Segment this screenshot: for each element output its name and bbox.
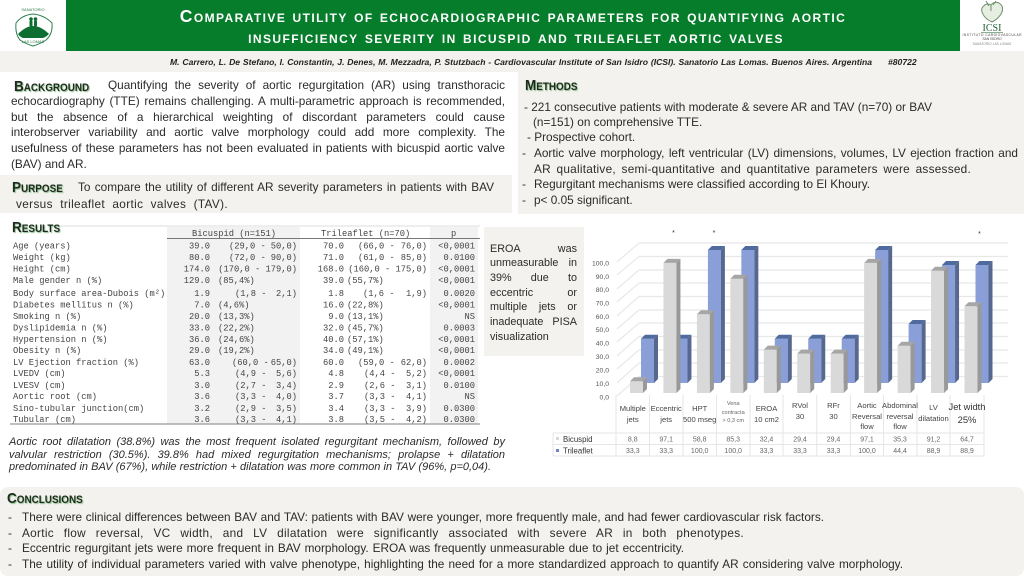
row: dyslipidemia: 32.0 (323, 324, 344, 334)
row: tubular: (3,5 - (364, 415, 396, 425)
row: weight: 0.0100 (443, 253, 475, 263)
legend: bicuspid row: 35,3 (893, 436, 907, 444)
caption: regurgitant mechanisms: valvular restriction (30.5%). 39.8% had mixed regurgitation mechanisms; prolapse + dilatation (9, 449, 505, 461)
table header (192, 229, 456, 239)
category labels: Multiple (620, 404, 646, 413)
y axis labels: 100,0 (592, 260, 609, 268)
row: obesity: 29.0 (189, 346, 210, 356)
row: body surface area: 0.0020 (443, 289, 475, 299)
category labels: Reversal (852, 412, 882, 421)
purpose text (16, 180, 494, 211)
methods list: p< 0.05 significant. (534, 193, 633, 207)
row: male gender: (55,7%) (347, 276, 384, 286)
background text: Quantifying the severity of aortic regurgitation (AR) using transthoracic (108, 78, 505, 92)
row: LV ejection fraction: 60.0 (323, 358, 344, 368)
background text: (BAV) and AR. (11, 157, 87, 171)
row: LVESV (13, 381, 475, 391)
y axis labels: 10,0 (596, 381, 609, 388)
row: body surface area: Body surface area-Dubois (m²) (13, 289, 165, 299)
row: LVEDV: (4,9 - (235, 369, 267, 379)
header banner (0, 0, 1024, 72)
callout: EROA: unmeasurable in (490, 257, 577, 269)
row: obesity: 34.0 (323, 346, 344, 356)
row: hypertension (13, 335, 475, 345)
row: sino-tubular junction: 3,5) (276, 404, 297, 414)
legend: bicuspid row: 8,8 (628, 436, 638, 444)
row: age (13, 242, 475, 252)
logo: Sanatorio Las Lomas: LAS LOMAS (22, 39, 45, 44)
bicuspid bars (630, 259, 982, 393)
row: dyslipidemia: Dyslipidemia n (%) (13, 324, 108, 334)
table header: Bicuspid (n=151) (192, 229, 276, 239)
y axis labels: 60,0 (596, 314, 609, 321)
significance markers: * (713, 230, 716, 237)
conclusions list: There were clinical differences between BAV and TAV: patients with BAV were younger, more frequently male, and had fewer cardiovascular risk factors. (22, 510, 824, 524)
significance markers (672, 230, 981, 238)
row: LV ejection fraction: 63.0 (189, 358, 210, 368)
row: LVEDV (13, 369, 475, 379)
row: hypertension: (24,6%) (218, 335, 255, 345)
category labels: HPT (692, 404, 708, 413)
category labels: flow (860, 422, 874, 431)
table header: Trileaflet (n=70) (321, 229, 410, 239)
row: LVESV: 0.0100 (443, 381, 475, 391)
legend: bicuspid row: 85,3 (726, 436, 740, 444)
row: height: 174.0 (184, 264, 210, 274)
row: LVESV: LVESV (cm) (13, 381, 66, 391)
green title bar (66, 0, 960, 51)
row: male gender (13, 276, 475, 286)
caption: regurgitant mechanisms: predominated in BAV (67%), while restriction + dilatation was more common in TAV (96%, p=0,04). (9, 461, 491, 473)
purpose text: To compare the utility of different AR severity parameters in patients with BAV (78, 180, 494, 194)
row: age: (66,0 - (358, 242, 395, 252)
callout: EROA: EROA was (490, 243, 577, 255)
row: sino-tubular junction: 3.4 (328, 404, 344, 414)
legend: bicuspid row: 91,2 (927, 436, 940, 444)
conclusions list: - (8, 510, 12, 524)
row: body surface area: 1,9) (406, 289, 427, 299)
legend: trileaflet row: 100,0 (724, 448, 742, 455)
row: smoking (13, 312, 475, 322)
methods list: - (522, 193, 526, 207)
row: dyslipidemia: 33.0 (189, 324, 210, 334)
logo: ICSI (962, 0, 1022, 46)
methods list: - Prospective cohort. (527, 130, 635, 144)
row: weight: (72,0 - (229, 253, 266, 263)
logo: ICSI: INSTITUTO CARDIOVASCULAR (962, 33, 1022, 37)
category labels: 30 (829, 412, 838, 421)
category labels: Jet width (948, 401, 986, 412)
legend: bicuspid row: 64,7 (960, 436, 974, 444)
row: smoking: Smoking n (%) (13, 312, 81, 322)
row: aortic root: 3.6 (194, 392, 210, 402)
y axis labels: 70,0 (596, 300, 609, 308)
results table (10, 226, 480, 425)
row: sino-tubular junction: 3,9) (406, 404, 427, 414)
row: smoking: (13,3%) (218, 312, 255, 322)
row: smoking: 20.0 (189, 312, 210, 322)
row: LVEDV: 5.3 (194, 369, 210, 379)
category labels: > 0,3 cm (722, 418, 744, 424)
row: sino-tubular junction: 0.0300 (443, 404, 475, 414)
heading: background: Background (14, 78, 89, 95)
row: LVEDV: 5,2) (406, 369, 427, 379)
row: aortic root: NS (464, 392, 475, 402)
row: age: 70.0 (323, 242, 344, 252)
y axis labels (592, 260, 609, 402)
row: age: Age (years) (13, 242, 71, 252)
row: tubular (13, 415, 475, 425)
category labels: Abdominal (882, 401, 918, 410)
row: body surface area: (1,8 - (235, 289, 267, 299)
row: LVESV: (2,6 - (364, 381, 396, 391)
trileaflet bars (641, 246, 992, 383)
row: LV ejection fraction: LV Ejection fraction (%) (13, 358, 139, 368)
legend: bicuspid row: 29,4 (793, 436, 807, 444)
row: body surface area: (1,6 - (363, 289, 395, 299)
row: age: (29,0 - (229, 242, 266, 252)
row: sino-tubular junction: (2,9 - (235, 404, 267, 414)
row: obesity: (49,1%) (347, 346, 384, 356)
legend: trileaflet row: 33,3 (626, 448, 640, 455)
category labels: 30 (796, 412, 804, 421)
row: smoking: 9.0 (328, 312, 344, 322)
methods list: (n=151) on comprehensive TTE. (533, 115, 702, 129)
row: smoking: (13,1%) (347, 312, 384, 322)
category labels (620, 401, 986, 431)
row: age: <0,0001 (438, 242, 475, 252)
row: LVESV: 2.9 (328, 381, 344, 391)
category labels: RFr (827, 401, 840, 410)
category labels: 10 cm2 (754, 415, 779, 424)
row: diabetes: (4,6%) (218, 300, 250, 310)
legend: trileaflet row: 33,3 (659, 448, 673, 455)
row: LV ejection fraction: 65,0) (271, 358, 297, 368)
row: tubular: (3,3 - (235, 415, 267, 425)
row: obesity: (19,2%) (218, 346, 255, 356)
row: LVEDV: LVEDV (cm) (13, 369, 66, 379)
methods list: - (522, 177, 526, 191)
legend: trileaflet row: 88,9 (960, 448, 974, 455)
methods list: - (522, 146, 526, 160)
category labels: 25% (958, 414, 976, 425)
title line 1: Comparative utility of echocardiographic parameters for quantifying aortic (180, 6, 846, 26)
legend: trileaflet row: Trileaflet (563, 446, 593, 456)
row: aortic root: Aortic root (cm) (13, 392, 97, 402)
y axis labels: 50,0 (596, 327, 609, 334)
category labels: jets (659, 415, 672, 424)
logo: Sanatorio Las Lomas (15, 7, 53, 46)
row: body surface area (13, 289, 475, 299)
row: LV ejection fraction: (60,0 - (232, 358, 269, 368)
conclusions list: Eccentric regurgitant jets were more frequent in BAV morphology. EROA was frequently unmeasurable due to jet eccentricity. (22, 541, 684, 555)
background text: but the absence of a hierarchical weighting of discordant parameters could cause (11, 110, 505, 124)
row: hypertension: <0,0001 (438, 335, 475, 345)
background text: echocardiography (TTE) remains challenging. A multi-parametric approach is recommended, (11, 94, 505, 108)
row: height: 168.0 (318, 264, 344, 274)
legend: bicuspid row: 97,1 (659, 436, 673, 444)
methods list: AR qualitative, semi-quantitative and quantitative parameters were assessed. (534, 162, 971, 176)
significance markers: * (978, 231, 981, 238)
row: LV ejection fraction: 62,0) (401, 358, 427, 368)
conclusions list: - (8, 557, 12, 571)
row: LV ejection fraction (13, 358, 475, 368)
panel: purpose (0, 175, 512, 213)
row: male gender: <0,0001 (438, 276, 475, 286)
row: body surface area: 1.8 (328, 289, 344, 299)
row: hypertension: 40.0 (323, 335, 344, 345)
conclusions list: The utility of individual parameters varied with valve phenotype, highlighting the need for a more standardized approach to quantify AR considering valve morphology. (22, 557, 903, 571)
category labels: Vena (727, 401, 740, 407)
conclusions list: - (8, 526, 12, 540)
row: hypertension: Hypertension n (%) (13, 335, 108, 345)
callout: EROA: 39% due to (490, 272, 577, 284)
row: weight: 90,0) (271, 253, 297, 263)
row: diabetes: 7.0 (194, 300, 210, 310)
panel: methods (518, 72, 1024, 214)
category labels: contracta (722, 410, 746, 416)
category labels: LV (929, 403, 939, 412)
row: dyslipidemia: 0.0003 (443, 324, 475, 334)
category labels: reversal (886, 412, 914, 421)
heading: conclusions: Conclusions (7, 490, 83, 507)
category labels: flow (893, 422, 907, 431)
background text: usefulness of these parameters has not been evaluated in patients with bicuspid aortic valve (11, 141, 505, 155)
row: sino-tubular junction: Sino-tubular junction(cm) (13, 404, 144, 414)
legend: trileaflet row: 33,3 (760, 448, 773, 455)
row: male gender: 39.0 (323, 276, 344, 286)
heading: purpose: Purpose (12, 179, 63, 196)
row: sino-tubular junction: (3,3 - (364, 404, 396, 414)
table header: p (451, 229, 456, 239)
y axis labels: 20,0 (596, 368, 609, 374)
legend: bicuspid row: 29,4 (827, 436, 840, 444)
row: LVESV: (2,7 - (235, 381, 267, 391)
callout: EROA: visualization (490, 331, 549, 343)
row: aortic root: 4,1) (406, 392, 427, 402)
row: weight (13, 253, 475, 263)
row: LVEDV: <0,0001 (438, 369, 475, 379)
legend: trileaflet row: 44,4 (893, 448, 907, 455)
row: LVESV: 3,4) (276, 381, 297, 391)
row: diabetes: 16.0 (323, 300, 344, 310)
methods list: - 221 consecutive patients with moderate & severe AR and TAV (n=70) or BAV (524, 100, 932, 114)
row: weight: 71.0 (323, 253, 344, 263)
row: obesity: Obesity n (%) (13, 346, 81, 356)
caption: regurgitant mechanisms (8, 436, 506, 473)
background text: interobserver variability and aortic valve morphology could add more complexity. The (11, 125, 505, 139)
title line 2: insufficiency severity in bicuspid and trileaflet aortic valves (248, 27, 784, 47)
callout: EROA: eccentric or (490, 287, 577, 299)
panel: background (11, 78, 505, 171)
methods list: Regurgitant mechanisms were classified according to El Khoury. (534, 177, 870, 191)
y axis labels: 0,0 (600, 394, 609, 402)
row: smoking: NS (464, 312, 475, 322)
methods list: Aortic valve morphology, left ventricular (LV) dimensions, volumes, LV ejection fraction and (534, 146, 1018, 160)
row: tubular: 3.6 (194, 415, 210, 425)
caption: regurgitant mechanisms: Aortic root dilatation (38.8%) was the most frequent isolated regurgitant mechanism, followed by (9, 436, 505, 448)
row: LVEDV: (4,4 - (364, 369, 396, 379)
background text (11, 78, 505, 171)
conclusions list: Aortic flow reversal, VC width, and LV dilatation were significantly associated with severe AR in both phenotypes. (22, 526, 744, 540)
row: body surface area: 2,1) (276, 289, 297, 299)
callout: EROA (484, 227, 584, 356)
methods list (522, 100, 1018, 207)
row: LVESV: 3.0 (194, 381, 210, 391)
legend: trileaflet row: 100,0 (691, 448, 709, 455)
row: male gender: (85,4%) (218, 276, 255, 286)
row: diabetes (13, 300, 475, 310)
logo: ICSI: SAN ISIDRO (982, 37, 1002, 41)
row: aortic root: 4,0) (276, 392, 297, 402)
authors: M. Carrero, L. De Stefano, I. Constantin, J. Denes, M. Mezzadra, P. Stutzbach - Cardiovascular Institute of San Isidro (ICSI). Sanatorio Las Lomas. Buenos Aires. Argentina (170, 57, 872, 67)
row: age: 39.0 (189, 242, 210, 252)
category labels: RVol (792, 401, 808, 410)
row: diabetes: <0,0001 (438, 300, 475, 310)
authors strip (0, 51, 1024, 72)
row: aortic root: (3,3 - (235, 392, 267, 402)
category labels: EROA (756, 404, 778, 413)
row: dyslipidemia: (22,2%) (218, 324, 255, 334)
row: LV ejection fraction: (59,0 - (358, 358, 395, 368)
row: diabetes: Diabetes mellitus n (%) (13, 300, 134, 310)
conclusions list: - (8, 541, 12, 555)
row: LVESV: 3,1) (406, 381, 427, 391)
y axis labels: 30,0 (596, 354, 609, 361)
y axis labels: 90,0 (596, 274, 609, 281)
heading: results: Results (12, 219, 60, 236)
row: sino-tubular junction (13, 404, 475, 414)
row: height: <0,0001 (438, 264, 475, 274)
row: male gender: 129.0 (184, 276, 210, 286)
row: height (13, 264, 475, 274)
y axis labels: 80,0 (596, 287, 609, 294)
row: height: (160,0 - 175,0) (348, 264, 427, 274)
legend: trileaflet row: 33,3 (793, 448, 807, 455)
legend: bicuspid row: 32,4 (760, 436, 773, 444)
row: height: (170,0 - 179,0) (218, 264, 297, 274)
row: tubular: 4,1) (276, 415, 297, 425)
panel: conclusions (0, 487, 1024, 576)
callout: EROA: inadequate PISA (490, 316, 577, 328)
row: weight: 80.0 (189, 253, 210, 263)
legend: trileaflet row (556, 446, 974, 456)
row: weight: 85,0) (401, 253, 427, 263)
row: tubular: 0.0300 (443, 415, 475, 425)
legend: trileaflet row: 100,0 (858, 448, 876, 455)
category labels: dilatation (918, 414, 949, 423)
row: body surface area: 1.9 (194, 289, 210, 299)
conclusions list (8, 510, 903, 571)
row: weight: Weight (kg) (13, 253, 71, 263)
row: obesity: <0,0001 (438, 346, 475, 356)
row: aortic root: (3,3 - (364, 392, 396, 402)
row: age: 50,0) (271, 242, 297, 252)
row: height: Height (cm) (13, 264, 71, 274)
category labels: Aortic (857, 401, 877, 410)
y axis labels: 40,0 (596, 340, 609, 348)
row: hypertension: (57,1%) (347, 335, 384, 345)
category labels: jets (626, 415, 639, 424)
legend: bicuspid row: 58,8 (693, 436, 707, 444)
row: weight: (61,0 - (358, 253, 395, 263)
row: tubular: Tubular (cm) (13, 415, 76, 425)
significance markers: * (672, 230, 675, 237)
row: age: 76,0) (401, 242, 427, 252)
row: LVEDV: 4.8 (328, 369, 344, 379)
legend: trileaflet row: 88,9 (927, 448, 940, 455)
row: tubular: 4,2) (406, 415, 427, 425)
row: sino-tubular junction: 3.2 (194, 404, 210, 414)
row: LV ejection fraction: 0.0002 (443, 358, 475, 368)
logo: ICSI: SANATORIO LAS LOMAS (973, 42, 1012, 46)
callout: EROA: multiple jets or (490, 301, 577, 313)
logo: Sanatorio Las Lomas: SANATORIO (21, 7, 45, 12)
row: aortic root: 3.7 (328, 392, 344, 402)
row: diabetes: (22,8%) (347, 300, 384, 310)
legend: bicuspid row: Bicuspid (563, 435, 592, 444)
category labels: 500 mseg (683, 415, 716, 424)
row: dyslipidemia (13, 324, 475, 334)
purpose text: versus trileaflet aortic valves (TAV). (16, 197, 228, 211)
row: tubular: 3.8 (328, 415, 344, 425)
logo: ICSI: ICSI (983, 23, 1001, 34)
row: LVEDV: 5,6) (276, 369, 297, 379)
legend: bicuspid row (556, 435, 974, 444)
legend: trileaflet row: 33,3 (827, 448, 840, 455)
legend: bicuspid row: 97,1 (860, 436, 874, 444)
row: dyslipidemia: (45,7%) (347, 324, 384, 334)
row: hypertension: 36.0 (189, 335, 210, 345)
abstract number: #80722 (888, 57, 917, 67)
category labels: Eccentric (651, 404, 682, 413)
row: male gender: Male gender n (%) (13, 276, 102, 286)
heading: methods: Methods (525, 77, 578, 94)
row: aortic root (13, 392, 475, 402)
row: obesity (13, 346, 475, 356)
